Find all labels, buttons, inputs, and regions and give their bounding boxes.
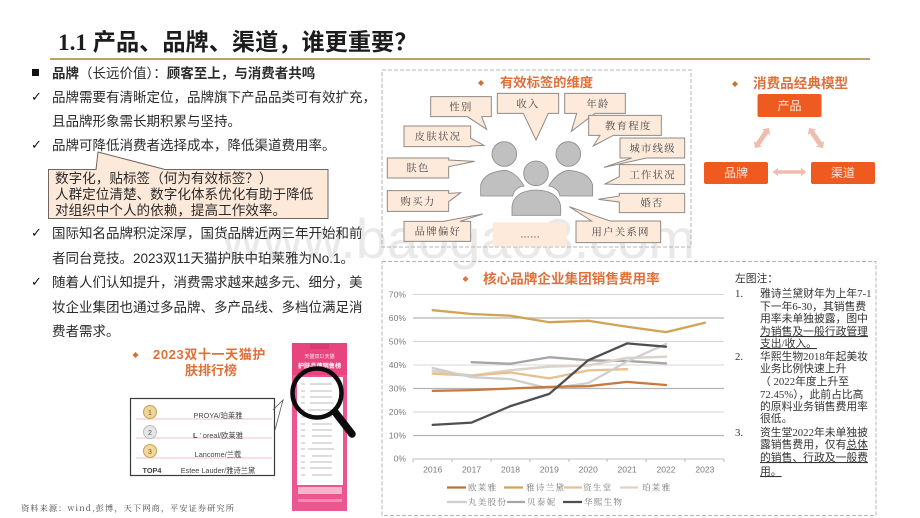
box: channel: 渠道 (831, 166, 855, 180)
chart notes: 下一年6-30，其销售费 (760, 299, 866, 313)
chart notes: 1. (735, 288, 743, 300)
medal 3: 3 (148, 449, 152, 456)
ranking poster with magnifier: 护肤品牌销售榜 (298, 362, 341, 370)
tag: user relations (569, 207, 661, 243)
series: Proya (433, 357, 666, 376)
medal 3 (144, 444, 156, 458)
x axis labels: 2016 (423, 464, 442, 474)
legend: 欧莱雅 (468, 482, 497, 494)
tag: education (589, 115, 661, 146)
tag: brand preference (404, 214, 483, 241)
medal 1 (144, 406, 156, 418)
series: Loreal (433, 382, 666, 391)
zoom pointer lines (273, 400, 283, 430)
series: Estee Lauder (433, 310, 705, 332)
panel: effective label dimensions (382, 70, 691, 247)
chart notes: 2. (735, 351, 743, 363)
tag: income: 收入 (516, 95, 540, 110)
tag: skin tone (387, 158, 475, 178)
x axis labels (423, 464, 715, 474)
chart notes: 很低。 (760, 411, 792, 425)
x axis labels: 2020 (579, 464, 598, 474)
series: Beitaini (472, 357, 666, 364)
x axis labels: 2021 (618, 464, 637, 474)
tag: education: 教育程度 (605, 117, 652, 132)
legend: 雅诗兰黛 (526, 482, 565, 494)
bullet: positioning (31, 89, 376, 129)
legend: 华熙生物 (584, 496, 623, 508)
tag: marital status (598, 193, 685, 213)
medal 2: 2 (148, 430, 152, 437)
chart notes: 左图注： (735, 271, 778, 285)
heading: Tmall ranking (132, 347, 266, 378)
chart notes: 72.45%），此前占比高 (760, 387, 864, 401)
heading: Tmall ranking: 2023双十一天猫护 (153, 347, 266, 362)
x axis labels: 2018 (501, 464, 520, 474)
legend: 贝泰妮 (527, 496, 556, 508)
heading: Tmall ranking: 肤排行榜 (185, 363, 237, 378)
bullet heading: brand: 品牌（长远价值）：顾客至上，与消费者共鸣 (52, 65, 315, 81)
x axis labels: 2019 (540, 464, 559, 474)
label cloud and people icon (387, 93, 685, 247)
bullet: positioning: ✓ (31, 90, 42, 105)
ranking table: TOP4 (143, 466, 162, 475)
bullet: domestic brands: 国际知名品牌积淀深厚，国货品牌近两三年开始和前 (52, 225, 362, 241)
tag: gender: 性别 (449, 99, 473, 114)
watermark: www.baogao8.com (221, 207, 695, 270)
tag: user relations: 用户关系网 (592, 224, 650, 239)
title: 1.1 产品、品牌、渠道，谁更重要？ (58, 29, 417, 56)
tag: gender (431, 97, 491, 129)
callout: digital labels: 对组织中个人的依赖，提高工作效率。 (55, 202, 286, 218)
heading: classic model: 消费品经典模型 (753, 75, 848, 91)
chart notes (735, 271, 872, 478)
chart notes: 业务比例快速上升 (760, 361, 847, 375)
bullet: domestic brands: ✓ (31, 226, 42, 241)
bullet: lower cost: 品牌可降低消费者选择成本，降低渠道费用率。 (52, 137, 336, 153)
ranking table: Estee Lauder/雅诗兰黛 (181, 466, 256, 475)
series: Marubi (433, 344, 666, 388)
callout: digital labels: 人群定位清楚、数字化体系优化有助于降低 (55, 187, 314, 202)
chart notes: （ 2022年度上升至 (760, 374, 849, 388)
tag: skin condition: 皮肤状况 (415, 128, 461, 143)
ranking table: PROYA/珀莱雅 (194, 411, 242, 420)
tag: skin tone: 肤色 (406, 160, 430, 175)
tag: brand preference: 品牌偏好 (415, 223, 461, 238)
chart notes: 资生堂2022年未单独披 (760, 425, 868, 439)
tag: age: 年龄 (586, 95, 610, 110)
arrow: brand to channel (772, 168, 806, 176)
tag: blank area: …… (520, 229, 540, 240)
tag: purchasing power (387, 191, 461, 211)
ranking table: L ' oreal/欧莱雅 (193, 431, 243, 440)
icon: people (481, 142, 593, 215)
chart notes: 的销售、行政及一般费 (760, 450, 868, 464)
series: Bloomage (433, 343, 666, 425)
x axis labels: 2023 (695, 464, 715, 474)
heading: effective labels: 有效标签的维度 (500, 74, 593, 90)
bullet: lower cost: ✓ (31, 138, 42, 153)
chart notes: 的原料业务销售费用率 (760, 399, 868, 413)
tag: skin condition (404, 126, 484, 147)
chart notes: 支出/收入。 (760, 336, 817, 350)
bullet: positioning: 品牌需要有清晰定位，品牌旗下产品品类可有效扩充， (52, 89, 376, 105)
legend: 丸美股份 (468, 496, 507, 508)
icon: magnifier (292, 368, 352, 434)
box: product: 产品 (777, 99, 802, 113)
panel: sales expense ratio chart (382, 262, 876, 516)
box: brand: 品牌 (724, 166, 748, 180)
chart notes: 雅诗兰黛财年为上年7-1 (760, 286, 872, 300)
medal 1: 1 (148, 410, 152, 417)
line chart (389, 290, 724, 508)
tag: city tier (604, 138, 685, 167)
chart notes: 用。 (760, 466, 782, 478)
box: brand (704, 162, 768, 184)
chart notes: 用率未单独披露，图中 (760, 311, 868, 325)
bullet: diversified demand: 费者需求。 (52, 324, 120, 339)
panel: classic consumer goods model (704, 75, 875, 184)
y axis labels: 0% (394, 454, 406, 464)
ranking table (130, 398, 274, 476)
bullet: diversified demand: ✓ (31, 275, 42, 290)
arrow: product to channel (808, 128, 824, 148)
y axis labels (389, 290, 406, 464)
tag: job status (605, 165, 685, 185)
chart notes: 3. (735, 427, 743, 439)
series: Shiseido (433, 369, 627, 378)
bullet: domestic brands: 者同台竞技。2023双11天猫护肤中珀莱雅为No.1。 (52, 250, 354, 266)
ranking table: Lancome/兰蔻 (195, 450, 241, 459)
y axis labels: 70% (389, 290, 406, 300)
tag: income (497, 93, 559, 140)
box: product (758, 94, 822, 117)
heading: sales expense ratio: 核心品牌企业集团销售费用率 (483, 270, 660, 286)
x axis labels: 2022 (656, 464, 676, 474)
y axis labels: 40% (389, 360, 406, 370)
x axis labels: 2017 (462, 464, 481, 474)
bullet: diversified demand: 随着人们认知提升，消费需求越来越多元、细分，美 (52, 274, 362, 290)
callout: digital labels: 数字化，贴标签（何为有效标签？） (55, 170, 272, 186)
y axis labels: 20% (389, 407, 406, 417)
tag: job status: 工作状况 (629, 166, 676, 181)
arrow: brand to product (754, 128, 770, 148)
y axis labels: 30% (389, 384, 406, 394)
panel: brand text (31, 65, 376, 339)
y axis labels: 50% (389, 336, 406, 346)
bullet: diversified demand (31, 274, 362, 339)
y axis labels: 60% (389, 313, 406, 323)
tag: purchasing power: 购买力 (401, 193, 435, 208)
legend (447, 482, 671, 508)
bullet: positioning: 且品牌形象需长期积累与坚持。 (52, 113, 241, 129)
tag: age (565, 93, 625, 131)
box: channel (811, 162, 875, 184)
bullet: domestic brands (31, 225, 362, 266)
y axis labels: 10% (389, 430, 406, 440)
bullet: diversified demand: 妆企业集团也通过多品牌、多产品线、多档位满足消 (52, 299, 362, 315)
panel: Tmall ranking (130, 343, 352, 511)
chart notes: 华熙生物2018年起美妆 (760, 349, 868, 363)
ranking poster with magnifier: 天猫双11天猫 (304, 353, 335, 360)
legend: 珀莱雅 (642, 482, 671, 494)
chart notes: 露销售费用，仅有总体 (760, 437, 868, 451)
callout: digital labels (48, 152, 328, 218)
ranking poster with magnifier (292, 343, 352, 511)
tag: blank area (493, 222, 567, 247)
tag: city tier: 城市线级 (629, 140, 676, 155)
tag: marital status: 婚否 (640, 195, 664, 210)
chart notes: 为销售及一般行政管理 (760, 324, 868, 338)
medal 2 (144, 426, 156, 438)
legend: 资生堂 (583, 482, 612, 494)
source note: 资料来源：wind,彭博，天下网商，平安证券研究所 (21, 503, 235, 514)
